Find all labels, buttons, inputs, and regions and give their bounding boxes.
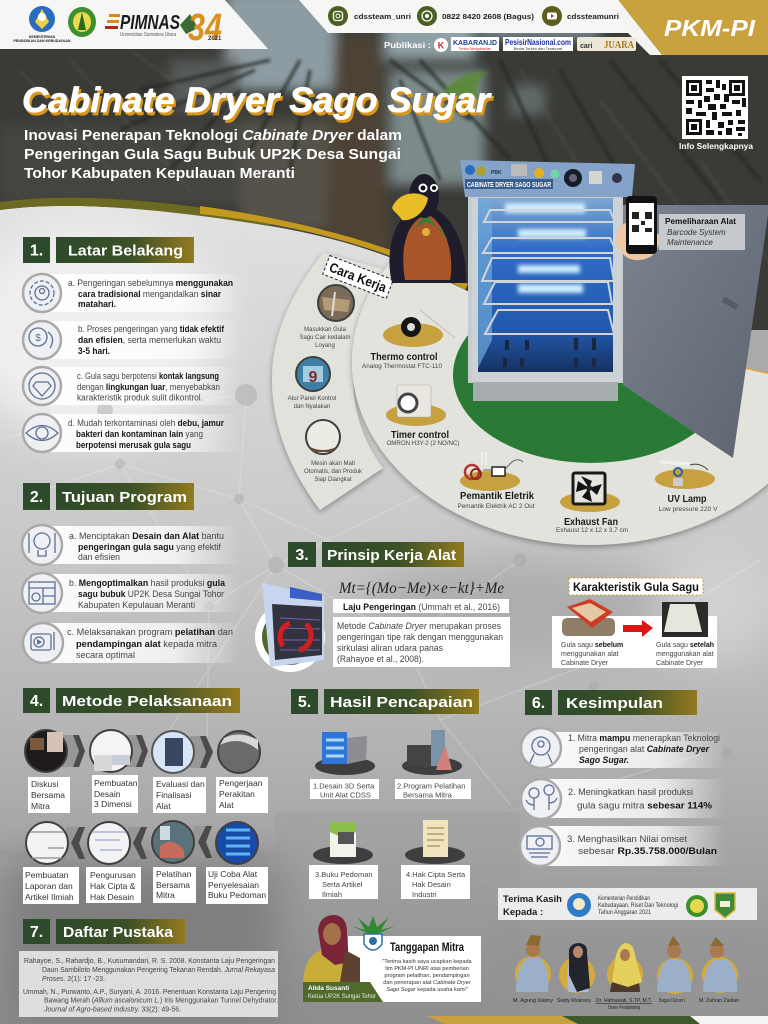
component: UV lamp: Low pressure 220 V (658, 506, 718, 513)
member names (513, 998, 739, 1011)
item c: karakteristik produk sulit dikontrol. (77, 392, 203, 402)
section 6 heading: Kesimpulan (566, 695, 663, 712)
tanggapan heading: Tanggapan Mitra (390, 942, 464, 954)
item a: pengeringan gula sagu yang efektif (78, 542, 221, 552)
step label 5: Penyelesaian (208, 880, 259, 890)
panel: cara kerja fan (268, 252, 386, 514)
step 2 (288, 357, 336, 410)
logo: juara: cari (580, 43, 593, 50)
callout: maintenance (616, 196, 745, 260)
logo: kabaran.id (451, 37, 499, 51)
cabinet control panel (460, 160, 635, 197)
step label 3: Evaluasi dan (156, 779, 205, 789)
panel: karakteristik gula sagu (552, 578, 717, 668)
section 6 heading: 6. (532, 695, 545, 712)
item c: c. Melaksanakan program pelatihan dan (67, 627, 233, 637)
icon: palm and water logo (352, 916, 395, 950)
item a: matahari. (78, 299, 116, 309)
step text: Masukkan Gula (304, 327, 347, 333)
step label 4 (216, 777, 268, 813)
step label 3: Alat (156, 801, 171, 811)
step label 6: Pelatihan (156, 869, 192, 879)
logo caption: PENDIDIKAN DAN KEBUDAYAAN (13, 39, 71, 43)
conclusion 1 (521, 728, 725, 768)
decorative olive and gold curved band (0, 198, 768, 381)
cabinet shelves (482, 210, 617, 334)
testimonial: "Terima kasih saya ucapkan kepada (382, 959, 473, 965)
step label 2: Pembuatan (94, 778, 138, 788)
logo: kabaran.id: KABARAN.ID (453, 38, 498, 47)
icon: dashboard (22, 573, 62, 613)
section 1 heading: Latar Belakang (68, 242, 183, 260)
logo: pesisir nasional: PesisirNasional.com (505, 38, 571, 47)
step label 6 (153, 867, 196, 903)
icon: diamond (23, 367, 61, 405)
icon: timer (397, 385, 431, 417)
section 5 heading (291, 689, 479, 714)
footer ribbon (427, 1016, 768, 1024)
component: thermo control: Thermo control (370, 352, 438, 363)
icon: thermostat (401, 310, 455, 338)
references: Rahayoe, S., Rahardjo, B., Kusumandari, R. S. 2008. Konstanta Laju Pengeringan (24, 958, 275, 965)
component: thermo control: Analog Thermostat FTC-110 (362, 363, 442, 370)
references: Daun Sambiloto Menggunakan Pengering Tekanan Rendah. Jurnal Rekayasa (42, 967, 275, 974)
step label 7: Pengurusan (90, 870, 136, 880)
icon: tools bulb (22, 525, 62, 565)
conclusion 3: 3. Menghasilkan Nilai omset (567, 834, 688, 844)
testimonial: program pelatihan, pendampingan (384, 973, 470, 979)
component: exhaust fan: Exhaust 12 x 12 x 3,7 cm (556, 527, 628, 534)
cara kerja label: Cara Kerja (327, 260, 389, 295)
diagram: cabinet air circulation (255, 583, 325, 672)
mascot: bird (389, 174, 466, 283)
step label 8: Pembuatan (25, 870, 69, 880)
member names: Dr. Hafnawati, S.TP, M.T. (596, 998, 652, 1004)
step label 7: Hak Desain (90, 892, 134, 902)
subtitle: Inovasi Penerapan Teknologi Cabinate Dryer dalam (24, 128, 402, 144)
icon: coin bulb (23, 321, 61, 359)
icon: award (521, 728, 561, 768)
component: timer control: OMRON H3Y-2 (2 NO/NC) (386, 440, 460, 447)
section 2 heading (23, 483, 194, 510)
formula: Mt={(Mo−Me)×e−kt}+Me (338, 580, 504, 597)
title: Cabinate Dryer Sago Sugar (22, 81, 492, 120)
icon: coin bulb: $ (35, 333, 41, 344)
conclusion 2: gula sagu mitra sebesar 114% (577, 800, 712, 810)
result 3: 3.Buku Pedoman (315, 870, 373, 879)
panel: tujuan program list (22, 525, 240, 663)
section 5 heading: Hasil Pencapaian (330, 694, 473, 711)
item b: b. Proses pengeringan yang tidak efektif (78, 324, 225, 334)
callout: maintenance: Maintenance (667, 238, 713, 247)
step label 5 (206, 867, 268, 904)
component: thermo control (362, 310, 455, 370)
item a (23, 274, 245, 312)
icon: video (23, 623, 63, 663)
step text: Siap Diangkat (314, 477, 352, 483)
method description: Metode Cabinate Dryer merupakan proses (337, 621, 501, 631)
step text: Otomatis, dan Produk (304, 469, 363, 475)
QR caption: Info Selengkapnya (679, 142, 754, 151)
name badge (303, 982, 383, 1002)
arrow (623, 620, 653, 637)
publication row (384, 37, 636, 52)
callout text: Pemeliharaan Alat (665, 217, 736, 226)
section 1 heading (23, 237, 194, 263)
logo: K (434, 38, 448, 52)
step label 2: Desain (94, 789, 121, 799)
step label 6: Bersama (156, 880, 190, 890)
item c (23, 623, 240, 663)
header: left logo banner (0, 0, 268, 49)
icon: youtube (542, 6, 562, 26)
instagram handle: cdssteam_unri (354, 12, 411, 21)
pimnas anniversary number (180, 7, 222, 49)
step label 1: Bersama (31, 790, 65, 800)
icon: university logo (68, 7, 96, 37)
result 1: 1.Desain 3D Serta (313, 782, 375, 790)
ministry text: Kebudayaan, Riset Dan Teknologi (598, 903, 678, 909)
result 3 (309, 822, 378, 899)
component: pemantik elektrik: Pemantik Eletrik (460, 491, 534, 502)
section 2 heading: Tujuan Program (62, 489, 187, 506)
item a: cara tradisional mengandalkan sinar (78, 289, 221, 299)
logo: juara: JUARA (604, 40, 635, 51)
icon: money (520, 826, 560, 866)
heading label (569, 578, 703, 595)
team members (513, 935, 739, 1011)
testimonial: tim PKM-PI UNRI atas pemberian (385, 966, 469, 972)
logo: K: K (438, 40, 445, 50)
result 1 (310, 732, 379, 800)
method description: pengeringan tipe rak dengan menggunakan (337, 632, 503, 642)
section 4 heading: 4. (30, 693, 43, 710)
icon: uv lamp (660, 462, 708, 486)
caption: setelah: Cabinate Dryer (656, 660, 704, 667)
step label 4: Alat (219, 800, 234, 810)
method description: (Rahayoe et al., 2008). (337, 654, 424, 664)
result 4: Industri (412, 890, 437, 899)
step label 3 (153, 777, 206, 813)
item a: dan efisien (78, 552, 120, 562)
cabinet left perforated wall (476, 198, 492, 372)
step photo 8 (26, 822, 68, 864)
cabinet frame (472, 198, 622, 382)
icon: fan (573, 473, 605, 504)
result 4: 4.Hak Cipta Serta (406, 870, 466, 879)
member names: Septy Khairany (557, 998, 591, 1004)
caption: setelah: menggunakan alat (656, 651, 714, 658)
step text: Mesin akan Mati (311, 461, 355, 467)
step label 5: Buku Pedoman (208, 890, 266, 900)
thank you heading: Terima Kasih (503, 894, 562, 905)
testimonial: Sago Sugar kepada usaha kami" (386, 987, 468, 993)
section 7 heading: Daftar Pustaka (63, 924, 174, 941)
step label 1 (28, 777, 70, 813)
step label 1: Mitra (31, 801, 50, 811)
step photo 2 (90, 730, 132, 772)
item b: dan efisien, serta memerlukan waktu (78, 335, 221, 345)
step label 4: Pengerjaan (219, 778, 263, 788)
image: book (330, 822, 356, 857)
pimnas wordmark: PIMNAS (120, 12, 180, 34)
name badge: Ketua UP2K Sungai Tohor (308, 994, 376, 1000)
header: social media bar (299, 0, 628, 33)
section 4 heading (23, 688, 240, 713)
portrait: alida susanti (303, 915, 360, 982)
photo: sebelum (562, 599, 615, 636)
panel: tanggapan mitra (303, 915, 481, 1002)
logo: university (686, 895, 708, 917)
subtitle: Tohor Kabupaten Kepulauan Meranti (24, 166, 295, 182)
member: septy (559, 943, 595, 993)
step photo 5 (216, 822, 258, 864)
cabinet body (468, 195, 623, 383)
result 4: Hak Desain (412, 880, 451, 889)
image: cabinet unit (322, 732, 367, 764)
formula caption: Laju Pengeringan (Ummah et al., 2016) (343, 602, 500, 612)
subtitle (24, 128, 402, 182)
name badge: Alida Susanti (308, 985, 349, 992)
ministry text: Tahun Anggaran 2021 (598, 910, 652, 916)
step 1 (299, 285, 354, 349)
logo: regency shield (715, 893, 735, 918)
cabinet control panel: PBK (491, 170, 502, 176)
component: UV lamp: UV Lamp (668, 494, 706, 505)
step label 1: Diskusi (31, 779, 59, 789)
section 6 heading (525, 690, 697, 715)
item d: bakteri dan kontaminan lain yang (76, 429, 203, 439)
section 3 heading: Prinsip Kerja Alat (327, 547, 456, 564)
step photo 1 (25, 730, 67, 772)
logo: kabaran.id: Terkini Mengabarkan (459, 47, 491, 51)
conclusion 1: Sago Sugar. (579, 755, 629, 765)
cabinet vents (503, 338, 596, 367)
logo: pesisir nasional (503, 37, 573, 51)
member names: Bagus Duhan I (659, 998, 685, 1004)
icon: igniter (465, 452, 523, 479)
component: UV lamp (655, 462, 718, 513)
cabinet door (623, 205, 768, 458)
youtube handle: cdssteamunri (567, 12, 619, 21)
caption: setelah: Gula sagu setelah (656, 642, 714, 649)
step label 2: 3 Dimensi (94, 799, 132, 809)
item b (23, 321, 240, 359)
item c: dengan lingkungan luar, menyebabkan (77, 382, 220, 392)
step label 2 (92, 775, 138, 813)
logo: kemendikbud (567, 893, 591, 917)
references: Ummah, N., Purwanto, A.P., Suryani, A. 2016. Penentuan Konstanta Laju Pengering (23, 989, 276, 996)
item b: Kabupaten Kepulauan Meranti (78, 600, 195, 610)
references (19, 951, 278, 1017)
item d (23, 414, 240, 452)
step label 4: Perakitan (219, 789, 255, 799)
logo caption: KEMENTERIAN (29, 35, 56, 39)
step label 8: Laporan dan (25, 881, 73, 891)
item c: c. Gula sagu berpotensi kontak langsung (77, 371, 219, 381)
step photo 7 (88, 822, 130, 864)
ministry text: Kementerian Pendidikan (598, 896, 650, 902)
conclusion 2: 2. Meningkatkan hasil produksi (568, 787, 693, 797)
testimonial: dan penerapan alat Cabinate Dryer (383, 980, 471, 986)
item b: b. Mengoptimalkan hasil produksi gula (69, 578, 226, 588)
heading label: Karakteristik Gula Sagu (573, 582, 699, 594)
result 4 (401, 820, 470, 899)
conclusion 1: 1. Mitra mampu menerapkan Teknologi (568, 733, 720, 743)
item b (22, 573, 240, 613)
result 3: Serta Artikel (322, 880, 363, 889)
item d: berpotensi merusak gula sagu (76, 440, 191, 450)
panel: kesimpulan (520, 728, 725, 866)
section 4 heading: Metode Pelaksanaan (62, 693, 232, 710)
component: exhaust fan (556, 473, 628, 534)
image: training (407, 730, 452, 770)
member: agung (515, 935, 551, 992)
item b: 3-5 hari. (78, 346, 110, 356)
icon: eye (23, 414, 61, 452)
section 5 heading: 5. (298, 694, 311, 711)
component: timer control: Timer control (391, 430, 449, 441)
panel: latar belakang list (23, 274, 245, 452)
step text: dan Nyalakan (294, 404, 330, 410)
phone number: 0822 8420 2608 (Bagus) (442, 12, 535, 21)
section 1 heading: 1. (30, 242, 43, 260)
conclusion 1: pengeringan alat Cabinate Dryer (579, 744, 709, 754)
cabinet control panel: CABINATE DRYER SAGO SUGAR (467, 182, 551, 189)
icon: pimnas stripes (105, 14, 120, 29)
step label 7 (86, 867, 141, 903)
logo: pesisir nasional: Berita Terkini dan Terakurat (514, 46, 563, 51)
member: hafnawati (607, 943, 643, 992)
member names: Dosen Pendamping (608, 1005, 640, 1011)
image: certificate (423, 820, 448, 857)
step label 3: Finalisasi (156, 790, 192, 800)
conclusion 3 (520, 826, 725, 866)
background: palm tree photo (0, 0, 768, 330)
references: Journal of Agro-based Industry. 33(2): 49-56. (43, 1006, 181, 1014)
header: PKM-PI badge: PKM-PI (664, 15, 756, 41)
step label 6: Mitra (156, 890, 175, 900)
method description: sirkulasi aliran udara panas (337, 643, 443, 653)
icon: whatsapp (417, 6, 437, 26)
member: zahran (702, 937, 738, 993)
result 2: 2.Program Pelatihan (397, 782, 465, 790)
icon: kemendikbud logo (29, 6, 55, 32)
panel: main ellipse (348, 261, 768, 550)
step photo 4 (218, 731, 260, 773)
subtitle: Pengeringan Gula Sagu Bubuk UP2K Desa Sungai (24, 147, 401, 163)
step label 5: Uji Coba Alat (208, 869, 258, 879)
result 1: Unit Alat CDSS (320, 790, 371, 800)
process flow: metode pelaksanaan (23, 730, 268, 904)
method description (333, 617, 510, 667)
section 7 heading: 7. (30, 924, 43, 941)
member: bagus (657, 936, 693, 994)
conclusion 2 (521, 779, 725, 819)
component: exhaust fan: Exhaust Fan (564, 517, 618, 528)
item b: sagu bubuk UP2K Desa Sungai Tohor (78, 589, 224, 599)
callout: maintenance: Barcode System (667, 228, 726, 237)
header: PKM-PI badge (618, 0, 768, 55)
step photo 3 (152, 731, 194, 773)
conclusion 3: sebesar Rp.35.758.000/Bulan (578, 846, 717, 856)
publication row: Publikasi : (384, 40, 431, 50)
step label 8 (23, 867, 79, 904)
caption: sebelum: Gula sagu sebelum (561, 642, 623, 649)
member names: M. Zahran Zaidan (699, 998, 739, 1004)
references: Proses. 2(1): 17 -23. (42, 976, 105, 983)
component: pemantik elektrik (458, 452, 535, 510)
component: timer control (386, 385, 460, 447)
member names: M. Agung Islamy (513, 998, 553, 1004)
pimnas anniversary number: 34 (188, 7, 222, 49)
step label 7: Hak Cipta & (90, 881, 136, 891)
panel: hasil pencapaian (309, 730, 471, 899)
pimnas caption: Universitas Sumatera Utara (120, 32, 176, 38)
result 2 (395, 730, 471, 800)
step label 8: Artikel Ilmiah (25, 892, 74, 902)
panel: tool showcase (268, 252, 768, 550)
icon: plants (521, 779, 561, 819)
component: pemantik elektrik: Pemantik Elektrik AC 2 Out (458, 503, 535, 510)
logo: juara (577, 37, 636, 51)
section 3 heading: 3. (295, 547, 309, 564)
item a (22, 525, 240, 565)
icon: gear person (23, 274, 61, 312)
caption: sebelum: menggunakan alat (561, 651, 619, 658)
turf: green circle (453, 287, 729, 463)
device: cabinet dryer (460, 160, 768, 458)
references: Bawang Merah (Allium ascalonicum L.) Iris Menggunakan Tunnel Dehydrator. (44, 998, 278, 1004)
ministry text (598, 896, 678, 916)
section 2 heading: 2. (30, 489, 43, 506)
icon: hand with phone (616, 196, 660, 260)
step photo 6 (152, 821, 194, 863)
formula caption (333, 599, 509, 613)
section 7 heading (23, 919, 185, 944)
item c: secara optimal (76, 650, 135, 660)
step text: Loyang (315, 343, 335, 349)
section 3 heading (288, 542, 464, 567)
photo: produk (306, 420, 340, 454)
connectors row 2 (66, 826, 212, 859)
thank you heading: Kepada : (503, 907, 543, 918)
item c: pendampingan alat kepada mitra (76, 639, 217, 649)
photo: panel kontrol: 9 (309, 369, 318, 386)
step 3 (304, 420, 363, 483)
result 3: Ilmiah (322, 890, 342, 899)
QR code (682, 76, 748, 139)
item d: d. Mudah terkontaminasi oleh debu, jamur (68, 418, 224, 428)
photo: setelah (662, 602, 708, 637)
icon: red circular arrows (280, 623, 311, 650)
step text: Atur Panel Kontrol (288, 396, 336, 402)
pimnas anniversary number: 2021 (208, 36, 222, 42)
connectors row 1 (60, 735, 213, 768)
cabinet base (473, 382, 618, 401)
item a: a. Menciptakan Desain dan Alat bantu (69, 531, 224, 541)
icon: instagram (328, 6, 348, 26)
step text: Sagu Cair kedalam (299, 335, 351, 341)
item c (23, 367, 240, 405)
thank you panel (498, 888, 757, 920)
result 2: Bersama Mitra (403, 790, 453, 800)
photo: loyang (318, 285, 354, 321)
item a: a. Pengeringan sebelumnya menggunakan (68, 278, 233, 288)
cabinet lights (505, 203, 586, 293)
caption: sebelum: Cabinate Dryer (561, 660, 609, 667)
